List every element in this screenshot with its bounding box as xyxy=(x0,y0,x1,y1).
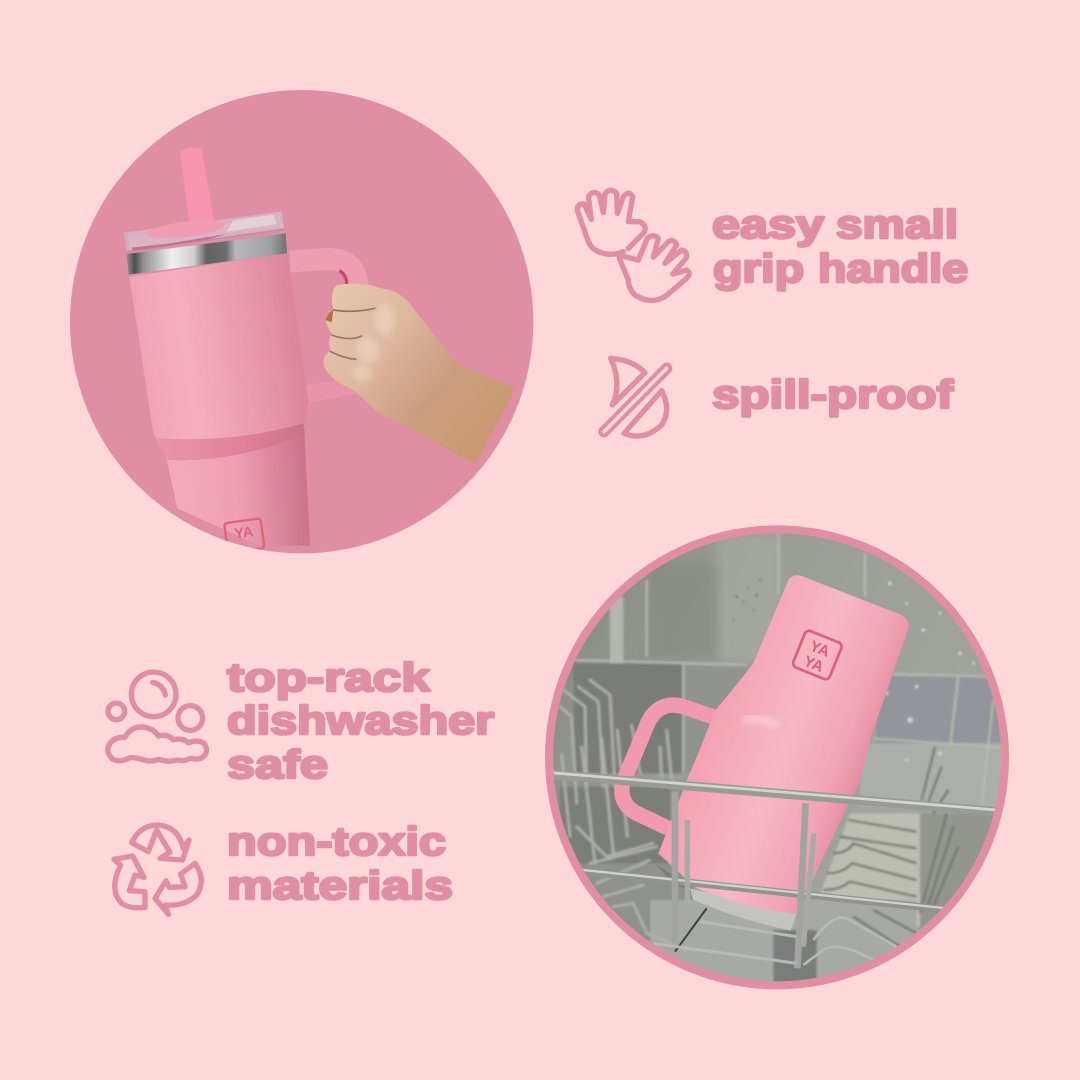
lid xyxy=(124,211,284,252)
tumbler metal rim xyxy=(656,864,692,892)
straw xyxy=(180,148,214,223)
text: top-rack dishwasher safe: dishwasher xyxy=(227,699,494,743)
back rack tines xyxy=(558,678,674,936)
text: top-rack dishwasher safe: safe xyxy=(227,743,328,787)
right rack tines xyxy=(823,747,958,947)
icon: recycling arrows xyxy=(114,825,201,914)
text: non-toxic materials xyxy=(227,820,453,908)
handle xyxy=(290,259,358,394)
tumbler logo xyxy=(224,518,265,553)
dishwasher interior xyxy=(553,533,1001,982)
tumbler logo: YA xyxy=(807,638,832,661)
tumbler handle xyxy=(622,705,715,828)
tumbler body xyxy=(130,254,308,446)
tumbler logo: YA xyxy=(233,524,255,543)
panel: photo of tumbler in dishwasher rack xyxy=(540,520,1020,1013)
text: non-toxic materials: materials xyxy=(227,864,453,908)
text: easy small grip handle xyxy=(712,203,968,291)
text: easy small grip handle: small xyxy=(836,203,958,247)
icon: two small hands xyxy=(577,190,689,300)
text: easy small grip handle: easy xyxy=(712,203,825,247)
upside-down tumbler xyxy=(658,575,909,914)
text: top-rack dishwasher safe: top-rack xyxy=(227,656,431,700)
tumbler step band xyxy=(157,423,305,460)
metal band xyxy=(127,233,287,275)
icon: bubbles and foam xyxy=(108,672,207,761)
tumbler logo: YA xyxy=(801,653,826,676)
text: easy small grip handle: grip xyxy=(713,247,804,291)
text: easy small grip handle: handle xyxy=(818,247,968,291)
icon: spill-proof xyxy=(604,358,667,436)
panel: photo of child hand holding tumbler xyxy=(70,90,533,553)
text: non-toxic materials: non-toxic xyxy=(227,820,446,864)
child hand xyxy=(324,284,516,465)
tumbler logo xyxy=(792,629,843,681)
water droplets xyxy=(732,579,761,621)
front rack rails and tines xyxy=(547,772,997,968)
text: spill-proof: spill-proof xyxy=(712,373,954,417)
text: top-rack dishwasher safe xyxy=(227,656,494,787)
